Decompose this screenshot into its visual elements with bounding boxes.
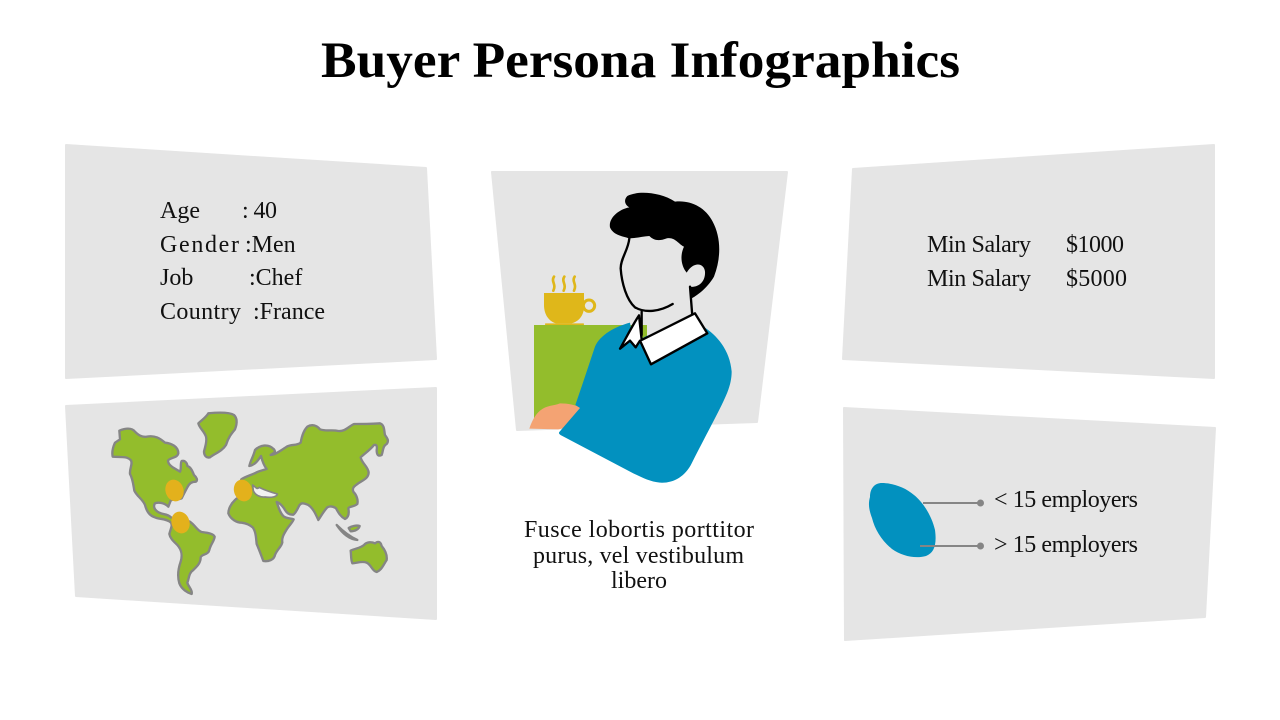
text: maximum salary: $5000 — [1066, 266, 1127, 292]
icon: coffee cup — [544, 277, 595, 325]
marker: north america — [163, 477, 186, 504]
text: minimum salary — [927, 232, 1124, 258]
label: under 15 employers: < 15 employers — [994, 487, 1138, 513]
text: job — [160, 265, 302, 291]
text: job: Job — [160, 265, 193, 291]
panel: employers — [844, 408, 1215, 640]
text: maximum salary: Min Salary — [927, 266, 1031, 292]
label: over 15 employers: > 15 employers — [994, 532, 1138, 558]
chart: employer blob — [869, 483, 936, 557]
text: country: Country — [160, 299, 241, 325]
map: continents — [112, 413, 388, 594]
text: caption — [524, 517, 754, 594]
icon: sweater — [559, 323, 732, 483]
text: gender: Gender — [160, 232, 239, 258]
title: Buyer Persona Infographics — [321, 33, 960, 89]
text: age — [160, 198, 277, 224]
panel: persona illustration — [492, 172, 787, 483]
icon: green box — [534, 325, 647, 418]
panel: demographics — [66, 145, 436, 378]
panel: salary — [843, 145, 1214, 378]
text: caption: purus, vel vestibulum — [533, 543, 744, 569]
text: job: :Chef — [249, 265, 302, 291]
text: minimum salary: Min Salary — [927, 232, 1031, 258]
icon: neck and face — [621, 233, 707, 336]
illustration: man with coffee — [529, 193, 732, 483]
text: gender: :Men — [245, 232, 296, 258]
leader: under 15 employers — [923, 500, 984, 506]
text: minimum salary: $1000 — [1066, 232, 1124, 258]
leader: over 15 employers — [920, 542, 984, 550]
text: age: : 40 — [242, 198, 277, 224]
text: country: :France — [253, 299, 325, 325]
icon: hand — [529, 403, 581, 429]
text: caption: Fusce lobortis porttitor — [524, 517, 754, 543]
panel: world map — [66, 388, 436, 619]
text: maximum salary — [927, 266, 1127, 292]
text: gender — [160, 232, 296, 258]
icon: collar — [620, 313, 707, 364]
text: caption: libero — [611, 568, 667, 594]
text: country — [160, 299, 325, 325]
icon: hair — [610, 193, 719, 298]
text: age: Age — [160, 198, 200, 224]
marker: europe — [231, 477, 255, 504]
marker: south america — [169, 509, 192, 536]
